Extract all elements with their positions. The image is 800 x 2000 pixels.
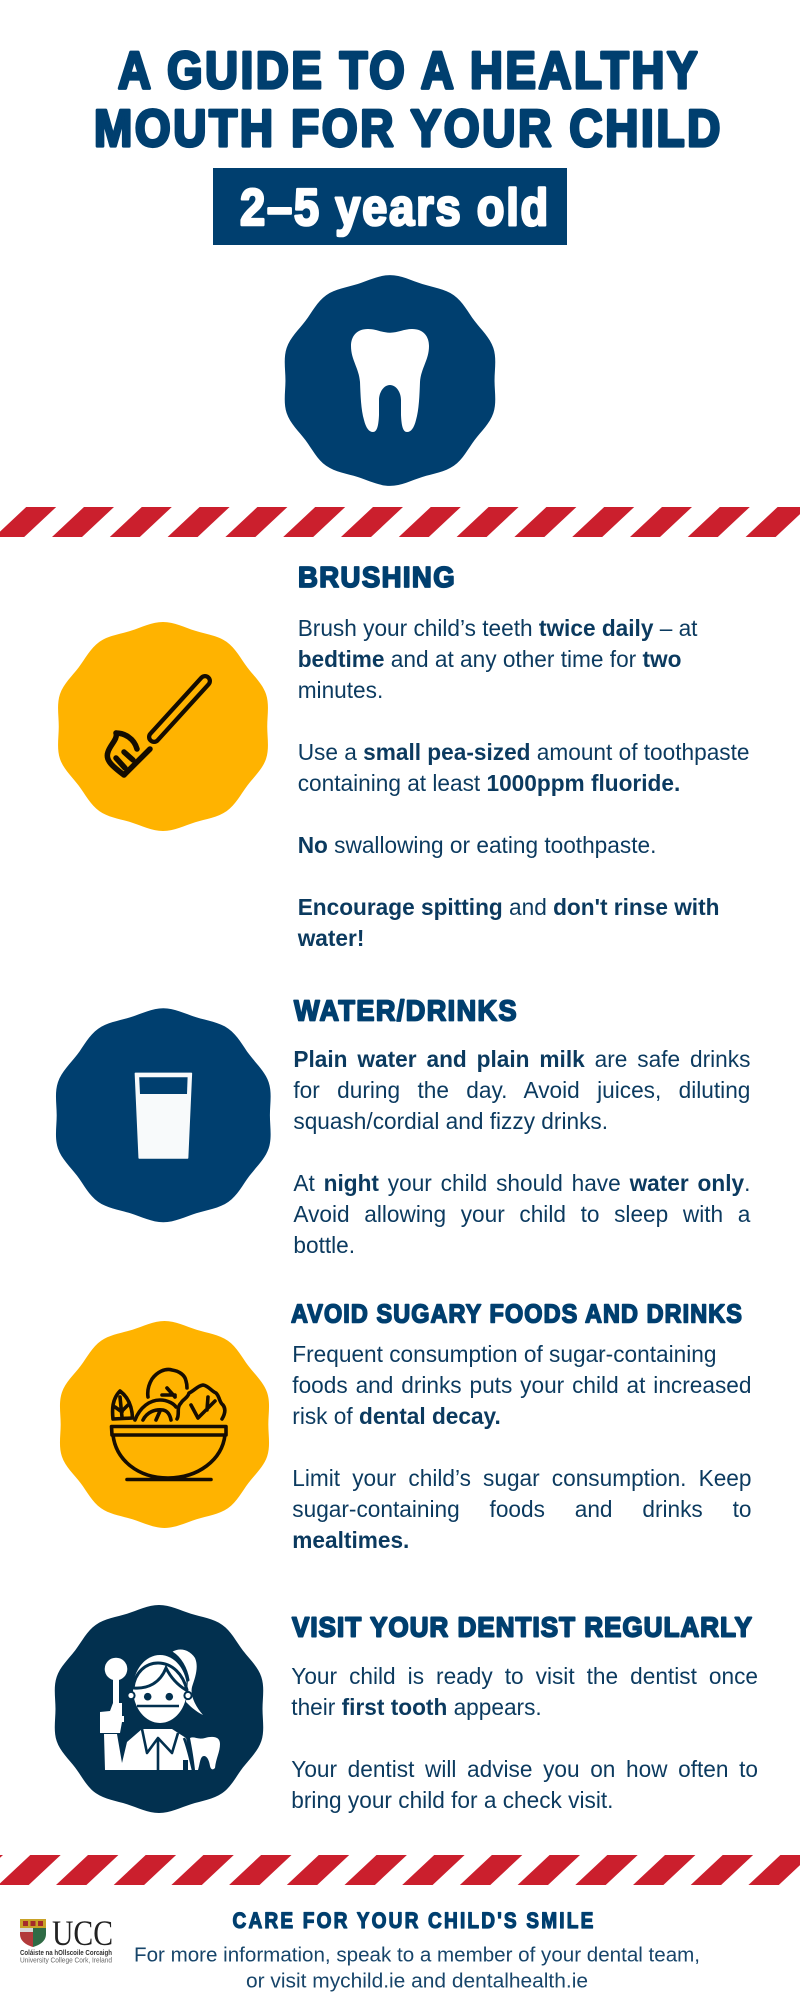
text block: sugar advice: [292, 1341, 751, 1553]
text block: brushing advice: [298, 615, 750, 951]
heading: visit your dentist: VISIT YOUR DENTIST REGULARLY: [292, 1612, 753, 1642]
text block: dentist advice: Your dentist will advise you on how often to: [291, 1756, 758, 1782]
footer text: or visit mychild.ie and dentalhealth.ie: [246, 1971, 588, 1993]
text block: sugar advice: mealtimes.: [292, 1527, 409, 1553]
text block: sugar advice: risk of dental decay.: [292, 1403, 501, 1429]
mirror: [100, 1658, 127, 1733]
text block: dentist advice: bring your child for a check visit.: [291, 1787, 613, 1813]
logo: UCC: UCC: [52, 1913, 113, 1953]
text block: sugar advice: Limit your child’s sugar consumption. Keep: [292, 1465, 751, 1491]
text block: brushing advice: No swallowing or eating toothpaste.: [298, 832, 656, 858]
footer: [0, 1855, 800, 1993]
text block: brushing advice: Brush your child’s teeth twice daily – at: [298, 615, 697, 641]
icon: glass badge: [56, 1008, 271, 1222]
striped divider top: [0, 507, 800, 537]
heading: water/drinks: WATER/DRINKS: [294, 996, 518, 1028]
text block: water advice: for during the day. Avoid juices, diluting: [293, 1077, 750, 1103]
text block: brushing advice: water!: [298, 925, 364, 951]
text block: water advice: squash/cordial and fizzy drinks.: [293, 1108, 608, 1134]
age banner: [213, 168, 567, 245]
text block: brushing advice: containing at least 1000ppm fluoride.: [298, 770, 680, 796]
footer text: For more information, speak to a member of your dental team,: [134, 1945, 700, 1967]
logo: UCC: University College Cork, Ireland: [20, 1958, 112, 1964]
title: MOUTH FOR YOUR CHILD: [94, 100, 723, 158]
panel: dentist visits: [54, 1605, 758, 1813]
panel: sugary foods: [60, 1298, 751, 1553]
icon: toothbrush badge: [58, 622, 268, 831]
text block: sugar advice: foods and drinks puts your child at increased: [292, 1372, 751, 1398]
heading: brushing: BRUSHING: [298, 562, 456, 594]
head: [133, 1655, 187, 1723]
text block: brushing advice: bedtime and at any other time for two: [298, 646, 681, 672]
text block: brushing advice: Use a small pea-sized amount of toothpaste: [298, 739, 750, 765]
icon: dentist badge: [55, 1605, 263, 1813]
footer heading: CARE FOR YOUR CHILD'S SMILE: [232, 1908, 596, 1933]
title: A GUIDE TO A HEALTHY: [118, 42, 700, 100]
text block: water advice: [293, 1046, 750, 1258]
text block: water advice: Plain water and plain milk are safe drinks: [293, 1046, 750, 1072]
logo: UCC: [20, 1913, 113, 1964]
body and collar: [104, 1729, 192, 1770]
text block: water advice: Avoid allowing your child to sleep with a: [293, 1201, 750, 1227]
eyes and mask: [144, 1693, 152, 1700]
panel: water and drinks: [56, 996, 750, 1258]
small tooth: [190, 1737, 220, 1770]
text block: brushing advice: Encourage spitting and don't rinse with: [298, 894, 719, 920]
ponytail: [172, 1650, 203, 1715]
text block: dentist advice: their first tooth appears.: [291, 1694, 542, 1720]
text block: dentist advice: [291, 1663, 758, 1813]
text block: water advice: bottle.: [293, 1232, 355, 1258]
header: [0, 42, 800, 537]
text block: water advice: At night your child should have water only.: [293, 1170, 750, 1196]
icon: tooth badge: [285, 275, 495, 486]
age banner: 2–5 years old: [240, 179, 550, 237]
title: [94, 42, 723, 158]
text block: dentist advice: Your child is ready to visit the dentist once: [291, 1663, 758, 1689]
logo: UCC: Coláiste na hOllscoile Corcaigh: [20, 1950, 112, 1957]
text block: brushing advice: minutes.: [298, 677, 383, 703]
crest: [20, 1919, 46, 1947]
striped divider bottom: [0, 1855, 800, 1885]
text block: sugar advice: Frequent consumption of sugar-containing: [292, 1341, 716, 1367]
panel: brushing: [58, 562, 750, 951]
icon: salad bowl badge: [60, 1321, 269, 1528]
footer text: [134, 1945, 700, 1993]
heading: avoid sugary foods: AVOID SUGARY FOODS AND DRINKS: [291, 1298, 743, 1328]
text block: sugar advice: sugar-containing foods and drinks to: [292, 1496, 751, 1522]
